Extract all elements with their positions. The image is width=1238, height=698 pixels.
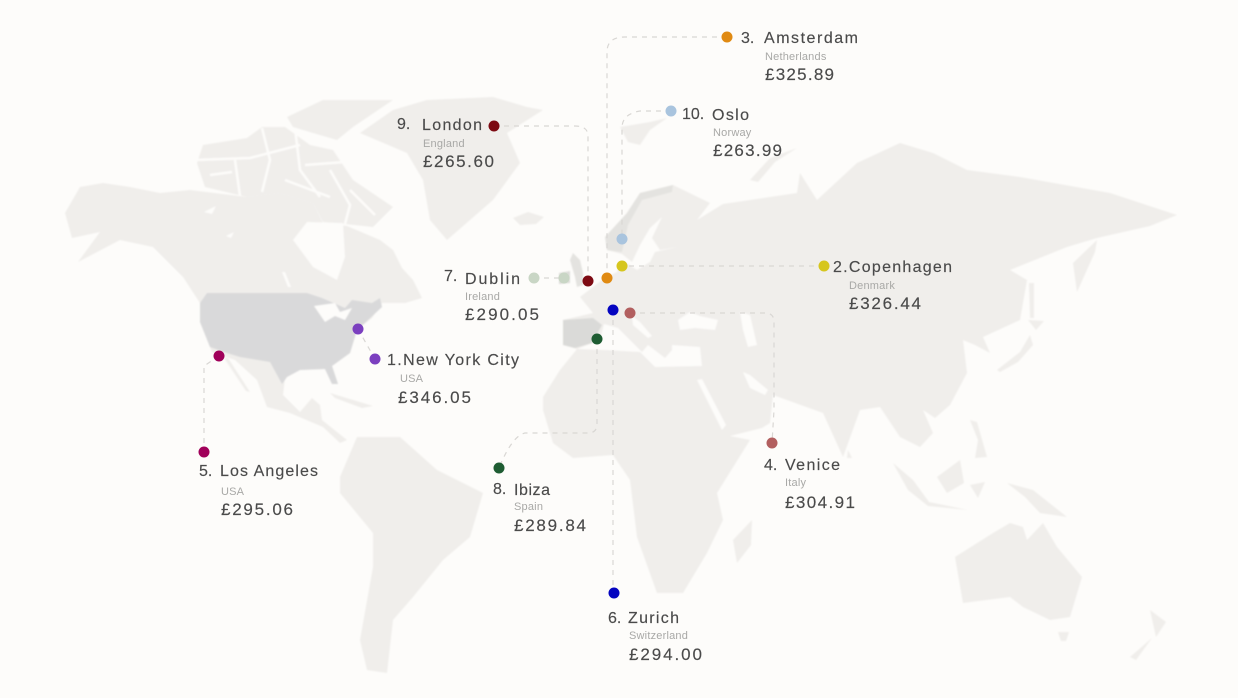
label: New York City (387, 352, 519, 407)
land: South America (340, 437, 483, 673)
dot: Copenhagen (616, 260, 830, 272)
land: Black Sea cutout (678, 312, 718, 330)
label: Oslo: Oslo (712, 107, 749, 124)
connector: Copenhagen (622, 265, 824, 267)
label: London: 9. (397, 116, 410, 133)
connector: Oslo (622, 111, 671, 239)
location dots (198, 32, 830, 598)
land: Tasmania (1058, 632, 1069, 641)
land: Arctic archipelago (197, 127, 393, 227)
label: Ibiza (493, 481, 586, 535)
label: Ibiza: £289.84 (514, 516, 586, 535)
land: Hudson Bay cutout (293, 222, 345, 280)
land: Sulawesi (970, 482, 985, 498)
label: Zurich: Zurich (628, 610, 679, 627)
land: Iceland (513, 212, 544, 225)
dot: Amsterdam (602, 32, 732, 284)
connector: Ibiza (499, 339, 597, 468)
label: Amsterdam: 3. (741, 30, 754, 47)
label: Los Angeles (199, 463, 318, 519)
label: Oslo (682, 106, 782, 160)
land: North America (65, 183, 422, 443)
label: Venice: Venice (785, 457, 840, 474)
land: Japan (997, 335, 1033, 372)
land: Persian Gulf cutout (743, 372, 768, 395)
label: Oslo: 10. (682, 106, 704, 123)
label: Zurich: Switzerland (629, 630, 688, 642)
land: Red Sea cutout (697, 379, 726, 430)
land: Kamchatka (1073, 240, 1097, 292)
label: Zurich: 6. (608, 610, 621, 627)
land: Australia (955, 523, 1082, 620)
land: Spain (563, 318, 602, 348)
label: Zurich (608, 610, 702, 664)
label: Ibiza: Ibiza (514, 482, 550, 499)
land: Ellesmere Island (287, 100, 393, 140)
label: Oslo: £263.99 (713, 141, 782, 160)
dot: Ibiza (494, 334, 602, 474)
world map (65, 97, 1177, 673)
label: London (397, 116, 494, 171)
land: New Guinea (1007, 483, 1067, 517)
label: Zurich: £294.00 (629, 645, 702, 664)
dot: Venice (624, 308, 778, 448)
connector: Dublin (534, 277, 564, 279)
label: Copenhagen: Denmark (849, 280, 895, 292)
land: Baja California (224, 358, 250, 392)
connector: Venice (630, 313, 774, 443)
dot: Oslo (616, 106, 676, 244)
label: Venice: £304.91 (785, 493, 855, 512)
label: Ibiza: Spain (514, 501, 543, 513)
connector: London (494, 126, 588, 281)
label: Amsterdam (741, 30, 858, 84)
label: Dublin: Dublin (465, 271, 520, 288)
dot: New York City (352, 324, 380, 364)
land: Philippines (970, 420, 987, 458)
land: Eurasia and Africa (543, 143, 1177, 593)
label: Dublin: 7. (444, 268, 457, 285)
label: Los Angeles: USA (221, 486, 245, 498)
land: Canadian lakes (204, 206, 291, 287)
label: Ibiza: 8. (493, 481, 506, 498)
label: New York City: 1.New York City (387, 352, 519, 369)
label: Amsterdam: £325.89 (765, 65, 834, 84)
label: Copenhagen (833, 259, 952, 313)
dot: London (488, 120, 594, 286)
dashed connector lines (204, 37, 824, 593)
label: Venice: Italy (785, 477, 806, 489)
land: Greenland (360, 97, 543, 240)
land: Adriatic cutout (632, 316, 652, 338)
label: Los Angeles: £295.06 (221, 500, 293, 519)
dot: Zurich (608, 304, 620, 598)
label: Los Angeles: Los Angeles (220, 463, 318, 480)
label: New York City: USA (400, 373, 424, 385)
land: Hokkaido (1028, 320, 1044, 330)
label: Dublin (444, 268, 539, 324)
land: Caspian cutout (740, 312, 757, 347)
label: New York City: £346.05 (398, 388, 471, 407)
land: Arctic channels (195, 128, 375, 224)
label: Venice: 4. (764, 457, 777, 474)
label: London: £265.60 (423, 152, 494, 171)
land: Ireland (559, 271, 570, 284)
land: Sakhalin (1029, 283, 1034, 318)
land: Madagascar (733, 520, 752, 563)
connector: Zurich (612, 310, 614, 593)
land: Mediterranean cutout (577, 324, 702, 367)
land: Novaya Zemlya (750, 148, 797, 182)
label: London: England (423, 138, 465, 150)
label: Copenhagen: 2.Copenhagen (833, 259, 952, 276)
dot: Los Angeles (198, 350, 224, 458)
land: New Zealand (1130, 610, 1166, 660)
connector: New York City (358, 329, 375, 359)
land: Sumatra and Java (893, 463, 968, 510)
land: Svalbard (620, 118, 667, 145)
label: Amsterdam: Netherlands (765, 51, 827, 63)
label: Copenhagen: £326.44 (849, 294, 921, 313)
land: Borneo (937, 460, 964, 493)
connector: Amsterdam (607, 37, 727, 277)
label: Oslo: Norway (713, 127, 752, 139)
label: Dublin: Ireland (465, 291, 500, 303)
land: Norway (605, 185, 673, 252)
land: USA highlighted (200, 293, 382, 384)
label: Los Angeles: 5. (199, 463, 212, 480)
dot: Dublin (528, 272, 570, 284)
connector: Los Angeles (204, 356, 219, 452)
label: Amsterdam: Amsterdam (764, 30, 858, 47)
label: London: London (422, 117, 482, 134)
label: Venice (764, 457, 855, 512)
land: Sri Lanka (847, 450, 852, 458)
label: Dublin: £290.05 (465, 305, 539, 324)
land: Great Lakes cutout (314, 303, 352, 322)
land: Cuba (330, 393, 373, 408)
land: Britain (570, 253, 583, 287)
